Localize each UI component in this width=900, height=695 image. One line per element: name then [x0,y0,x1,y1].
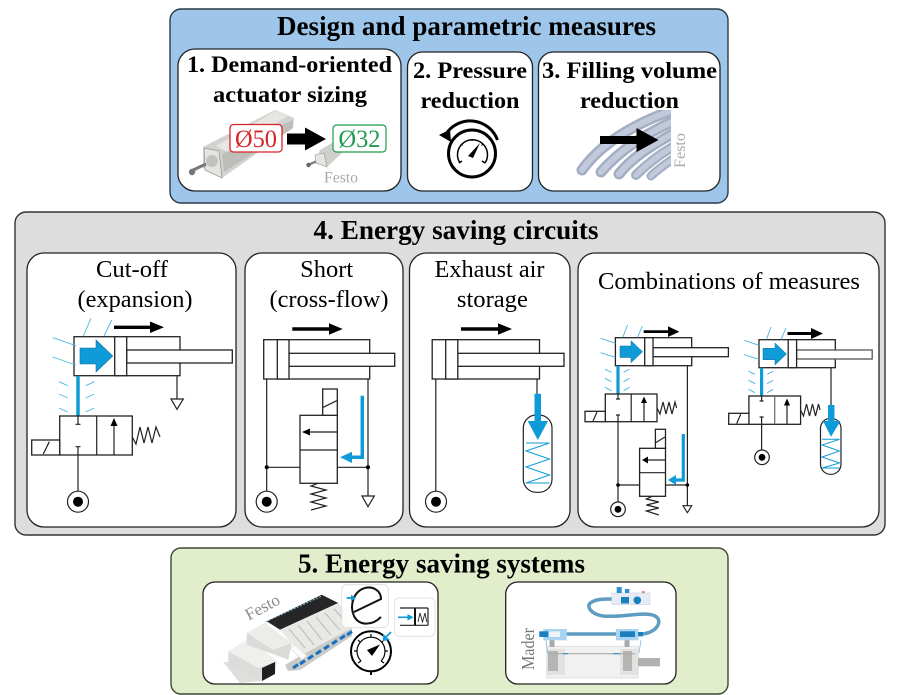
icon: gauge [351,631,391,675]
panel: energy saving systems [171,548,728,694]
panel: actuator sizing: actuator sizing [213,82,367,108]
heading: short cross-flow: Short [300,257,354,283]
heading: filling volume reduction: 3. Filling volume [542,58,717,84]
credit: Festo: Festo [242,590,283,624]
heading: energy saving circuits: 4. Energy saving circuits [314,215,598,245]
heading: combinations of measures: Combinations of measures [598,269,860,295]
panel: short cross-flow [245,253,403,527]
panel: exhaust air storage: storage [457,287,528,313]
panel: cut-off [27,253,236,527]
heading: exhaust air storage: Exhaust air [434,257,544,283]
credit: Mader: Mader [518,628,538,670]
diagram: cut-off with exhaust storage circuit [729,327,872,474]
heading: energy saving systems: 5. Energy saving systems [298,548,585,578]
arrow: sizing [287,128,326,150]
panel: pressure reduction [408,52,532,191]
icon: pressure gauge [439,121,498,177]
panel: design and parametric measures [170,9,728,203]
credit: Festo: Festo [324,170,358,186]
panel: filling volume reduction [538,52,720,191]
diagram: short circuit [256,323,395,512]
icon: small actuator photo [306,140,345,167]
credit: Festo: Festo [672,133,689,168]
icon: tubes photo [582,109,676,176]
icon: exhaust symbol [394,598,435,636]
panel: pressure reduction: reduction [420,88,520,114]
diagram: cut-off with short circuit [585,325,728,517]
icon: large actuator photo [189,110,294,178]
panel: pressure sensing system [506,582,676,684]
arrow: volume [600,128,658,152]
panel: actuator sizing [178,49,401,191]
heading: design and parametric measures: Design and parametric measures [277,11,656,41]
panel: combinations of measures [578,253,879,527]
heading: cut-off: Cut-off [96,257,168,283]
panel: cut-off: (expansion) [78,287,192,313]
label: diameter 32: Ø32 [338,126,380,153]
image: valve terminal photo [223,595,352,683]
diagram: exhaust storage circuit [426,323,564,512]
panel: filling volume reduction: reduction [580,88,679,114]
panel: valve terminal system [203,582,438,684]
heading: pressure reduction: 2. Pressure [413,58,527,84]
panel: energy saving circuits [15,212,885,535]
icon: energy e [342,585,388,628]
image: cylinder with hoses photo [539,587,660,678]
panel: short cross-flow: (cross-flow) [270,287,388,313]
diagram: cut-off circuit [32,318,232,512]
label: diameter 50: Ø50 [235,126,277,153]
panel: exhaust air storage [410,253,570,527]
heading: actuator sizing: 1. Demand-oriented [187,52,392,78]
